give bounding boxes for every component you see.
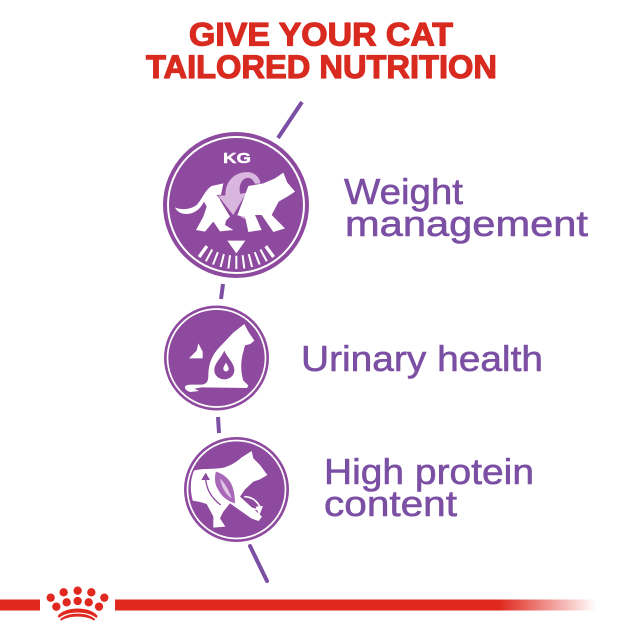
icon: high protein bbox=[184, 437, 289, 542]
title: GIVE YOUR CAT bbox=[189, 16, 453, 52]
icon: weight management: KG bbox=[223, 150, 251, 167]
footer rule: right with fade bbox=[115, 600, 596, 610]
connector line: between urinary and protein icons bbox=[218, 417, 219, 433]
text: weight management: management bbox=[345, 203, 588, 244]
connector line: bottom bbox=[250, 546, 267, 581]
connector line: between weight and urinary icons bbox=[221, 284, 223, 299]
text: urinary health: Urinary health bbox=[301, 338, 543, 379]
connector line: top bbox=[278, 102, 302, 138]
logo: crown bbox=[46, 586, 108, 621]
title: TAILORED NUTRITION bbox=[146, 49, 497, 85]
icon: weight management bbox=[163, 132, 309, 278]
text: weight management: Weight bbox=[344, 171, 463, 212]
icon: urinary health bbox=[164, 306, 269, 410]
text: high protein content bbox=[324, 451, 534, 524]
text: high protein content: High protein bbox=[324, 451, 534, 492]
text: high protein content: content bbox=[324, 483, 457, 524]
text: weight management bbox=[344, 171, 588, 244]
footer rule: left bbox=[0, 600, 40, 610]
title bbox=[146, 16, 497, 85]
